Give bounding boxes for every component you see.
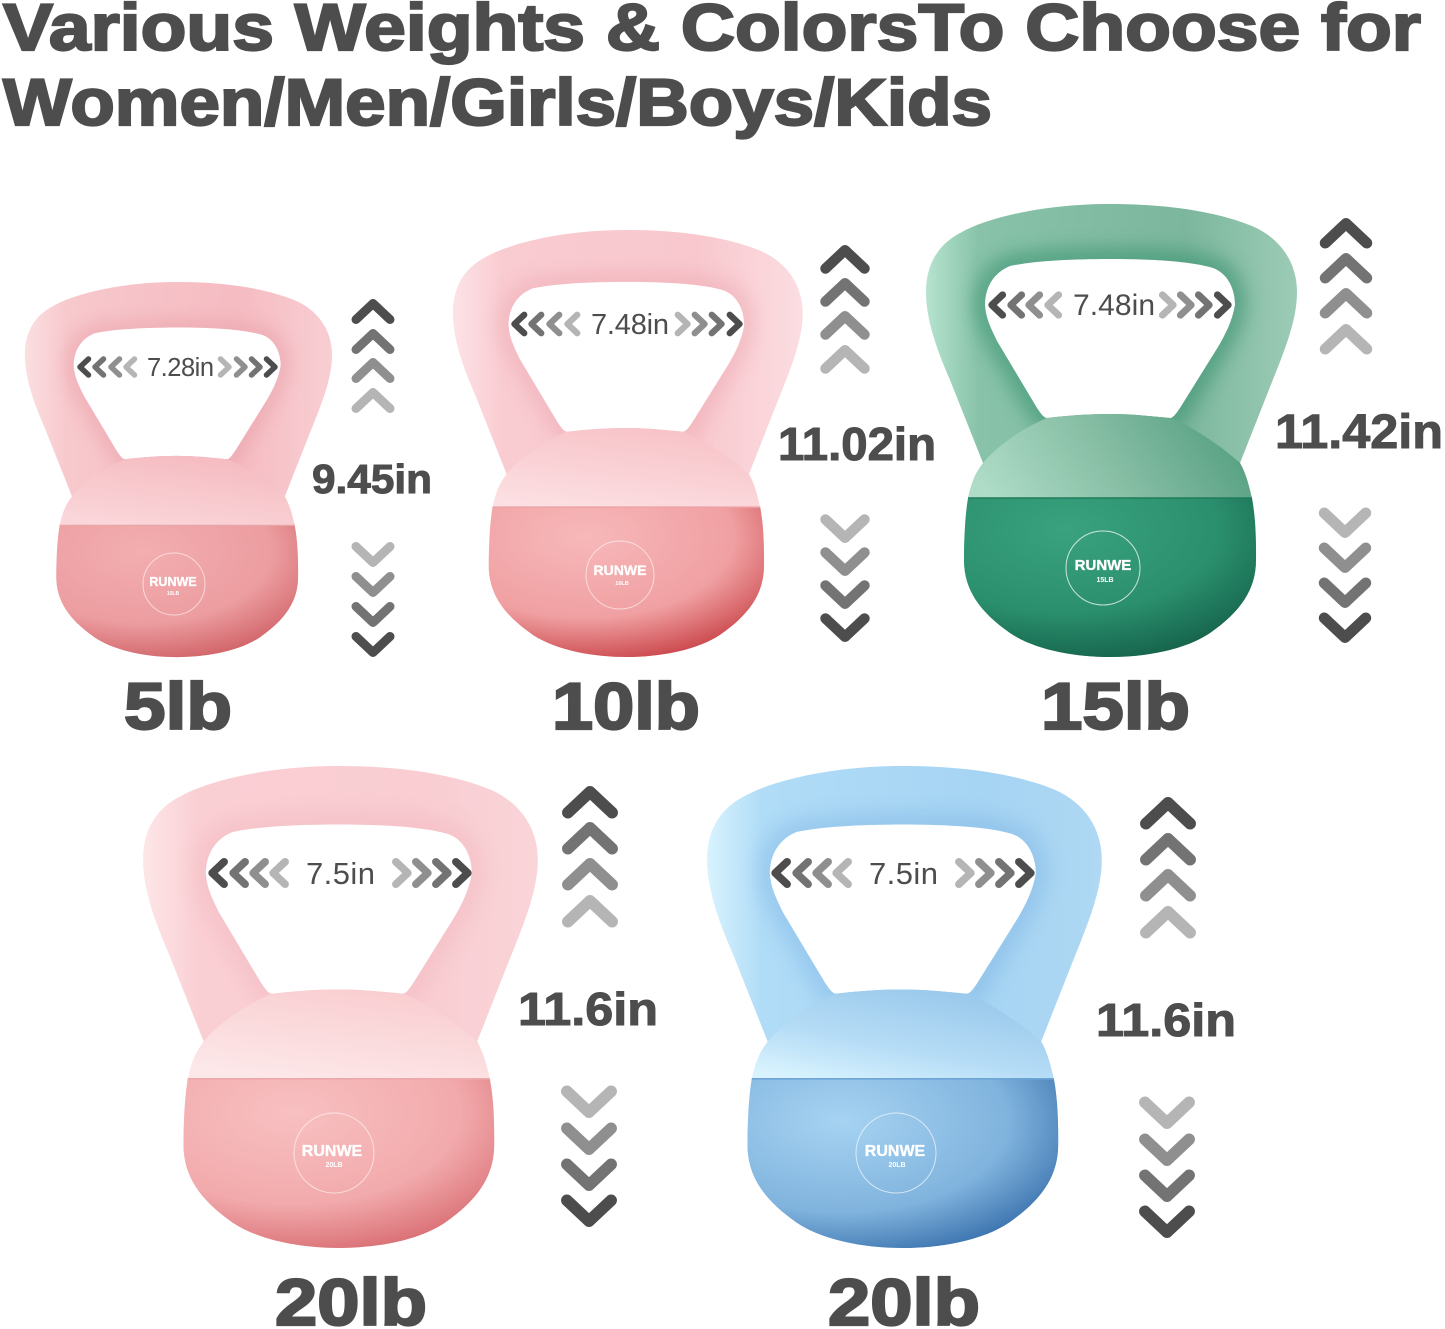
width arrows 5lb xyxy=(80,354,275,382)
logo badge 10lb: RUNWE xyxy=(594,562,646,578)
kettlebell body 10lb xyxy=(453,230,803,657)
width arrows 10lb xyxy=(514,309,740,341)
height arrows 5lb xyxy=(356,304,390,652)
panel: 5lb pink kettlebell xyxy=(25,282,332,657)
height arrows 10lb xyxy=(825,250,865,637)
height label 10lb: 11.02in xyxy=(778,418,936,470)
logo badge 20lb pink xyxy=(294,1113,374,1193)
title: Women/Men/Girls/Boys/Kids xyxy=(3,65,992,139)
width arrows 5lb: 7.28in xyxy=(147,354,214,382)
logo badge 15lb: 15LB xyxy=(1096,577,1114,584)
weight label 15lb: 15lb xyxy=(1041,669,1190,743)
height label 20lb blue: 11.6in xyxy=(1096,994,1236,1046)
logo badge 20lb blue xyxy=(856,1113,936,1193)
title xyxy=(3,0,1421,139)
logo badge 10lb: 10LB xyxy=(615,581,629,587)
logo badge 5lb: 10LB xyxy=(167,591,179,597)
width arrows 15lb: 7.48in xyxy=(1073,289,1155,322)
panel: 20lb blue kettlebell xyxy=(707,766,1102,1248)
height arrows 20lb blue xyxy=(1145,803,1190,1232)
height arrows 15lb xyxy=(1324,223,1367,638)
width arrows 15lb xyxy=(992,289,1228,322)
kettlebell body 5lb xyxy=(25,282,332,657)
weight label 10lb: 10lb xyxy=(552,669,700,743)
width arrows 10lb: 7.48in xyxy=(591,309,669,341)
height label 20lb pink: 11.6in xyxy=(518,983,658,1035)
logo badge 20lb pink: 20LB xyxy=(325,1162,343,1169)
logo badge 5lb xyxy=(143,553,205,615)
panel: 20lb pink kettlebell xyxy=(143,766,538,1248)
logo badge 20lb blue: RUNWE xyxy=(865,1143,926,1160)
width arrows 20lb blue: 7.5in xyxy=(869,856,938,891)
width arrows 20lb blue xyxy=(775,856,1031,891)
height label 15lb: 11.42in xyxy=(1275,406,1443,459)
kettlebell body 15lb xyxy=(926,204,1297,657)
panel: 10lb pink kettlebell xyxy=(453,230,803,657)
kettlebell body 20lb pink xyxy=(143,766,538,1248)
logo badge 10lb xyxy=(586,541,654,609)
weight label 5lb: 5lb xyxy=(124,669,232,743)
logo badge 20lb pink: RUNWE xyxy=(302,1143,363,1160)
width arrows 20lb pink xyxy=(212,856,468,891)
height label 5lb: 9.45in xyxy=(312,456,432,502)
logo badge 20lb blue: 20LB xyxy=(888,1162,906,1169)
logo badge 15lb xyxy=(1066,531,1140,605)
kettlebell body 20lb blue xyxy=(707,766,1102,1248)
logo badge 15lb: RUNWE xyxy=(1075,557,1131,574)
width arrows 20lb pink: 7.5in xyxy=(306,856,375,891)
logo badge 5lb: RUNWE xyxy=(149,575,197,589)
panel: 15lb green kettlebell xyxy=(926,204,1297,657)
height arrows 20lb pink xyxy=(567,792,612,1221)
